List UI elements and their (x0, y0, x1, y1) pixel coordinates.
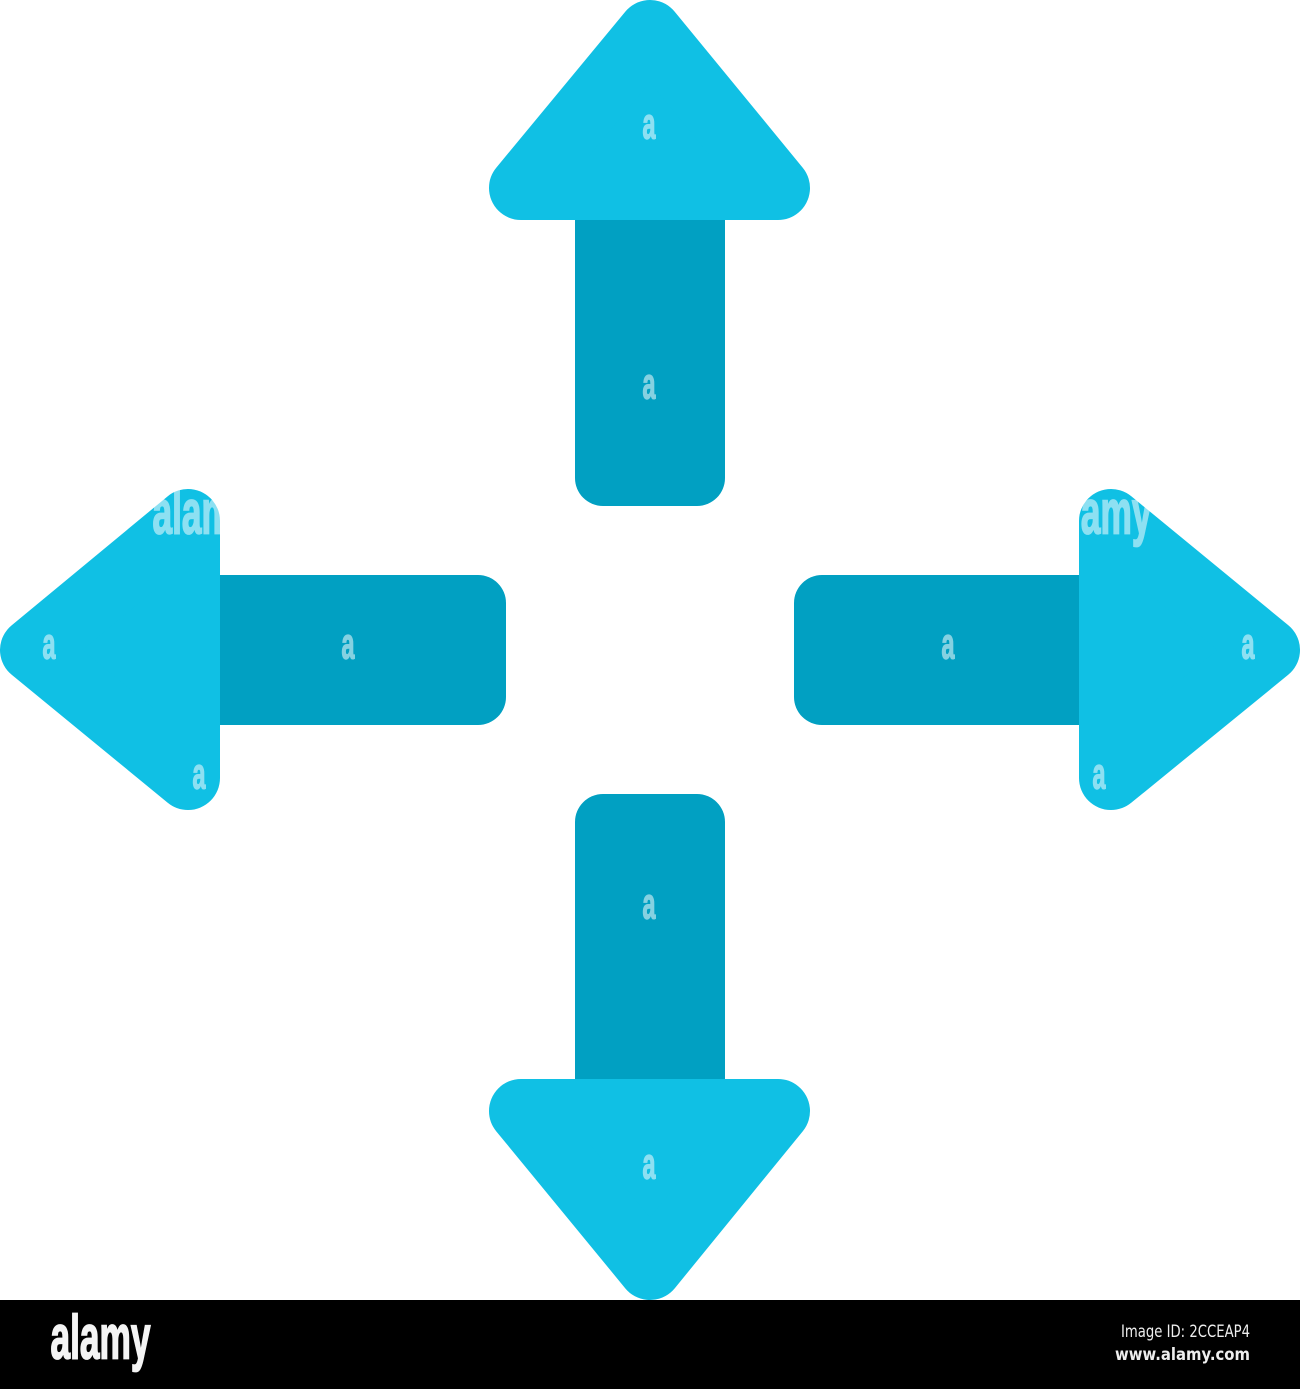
white cover hiding watermark left of right arrowhead (1040, 480, 1079, 570)
arrow: up (521, 32, 778, 506)
watermark letters: a (642, 880, 656, 928)
watermark letters: a (642, 1140, 656, 1188)
footer bar (0, 1300, 1300, 1389)
arrow: right (794, 521, 1268, 778)
watermark letters: a (642, 360, 656, 408)
image id: Image ID: 2CCEAP4 (1121, 1322, 1250, 1341)
website: www.alamy.com (1115, 1345, 1250, 1365)
watermark letters: a (1242, 620, 1255, 668)
watermark letters: a (192, 750, 206, 798)
watermark letters: a (942, 620, 955, 668)
watermark: right arrowhead: alamy (1052, 478, 1152, 548)
white cover hiding watermark over the background gap (220, 480, 460, 570)
watermark letters (42, 100, 1255, 1188)
arrow: down (521, 794, 778, 1268)
watermark letters: a (42, 620, 56, 668)
watermark: left arrowhead: alamy (152, 478, 253, 548)
watermark letters: a (642, 100, 656, 148)
footer logo: alamy (50, 1304, 151, 1372)
watermark letters: a (1092, 750, 1106, 798)
arrow: left (32, 521, 506, 778)
watermark letters: a (342, 620, 355, 668)
